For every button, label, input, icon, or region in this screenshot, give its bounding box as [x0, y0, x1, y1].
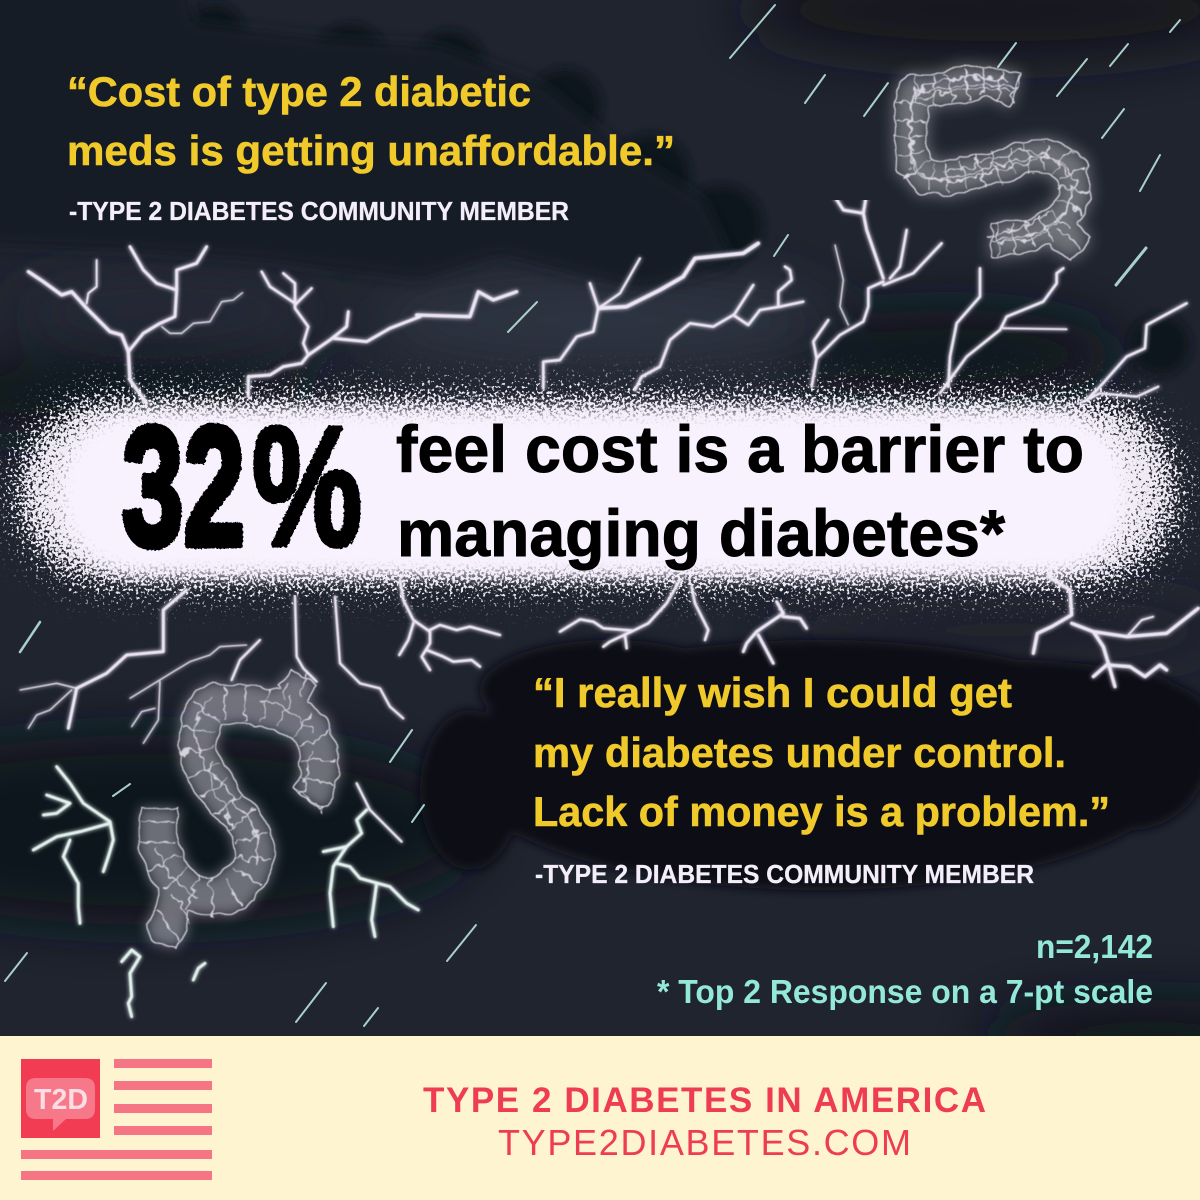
lightning bolts: upper left [28, 243, 803, 403]
headline statement: feel cost is a barrier to [396, 412, 1084, 486]
banner: sprayed white band [14, 396, 1180, 586]
lightning bolts: upper right [810, 158, 1187, 403]
quote: cost unaffordable: meds is getting unaffordable.” [67, 127, 675, 174]
attribution: bottom quote: -TYPE 2 DIABETES COMMUNITY MEMBER [535, 859, 1034, 889]
icon: top dollar sign made of cracked lightning [910, 77, 1083, 250]
sample size and footnote: * Top 2 Response on a 7-pt scale [657, 973, 1153, 1010]
headline statement: managing diabetes* [397, 496, 1005, 570]
lightning bolts: lower left [20, 590, 418, 1017]
quote: lack of money: my diabetes under control. [533, 729, 1066, 776]
quote: cost unaffordable: “Cost of type 2 diabetic [67, 68, 531, 115]
icon: bottom dollar sign made of cracked lightning [157, 673, 319, 940]
footer website: TYPE2DIABETES.COM [498, 1122, 911, 1163]
lightning bolts: lower middle and right [399, 577, 1198, 687]
sample size and footnote: n=2,142 [1036, 928, 1153, 965]
quote: lack of money: “I really wish I could get [533, 669, 1012, 716]
logo: T2D flag [21, 1059, 212, 1180]
logo: T2D flag: T2D [34, 1084, 88, 1116]
quote: cost unaffordable [67, 68, 675, 174]
attribution: top quote: -TYPE 2 DIABETES COMMUNITY MEMBER [69, 196, 569, 226]
quote: lack of money [533, 669, 1110, 835]
footer title: TYPE 2 DIABETES IN AMERICA [423, 1081, 986, 1120]
big statistic: 32%: % [252, 392, 362, 582]
headline statement [396, 412, 1084, 570]
sample size and footnote [657, 928, 1153, 1010]
big statistic: 32%: 32 [122, 392, 245, 582]
quote: lack of money: Lack of money is a problem.” [533, 788, 1110, 835]
footer panel [0, 1036, 1200, 1200]
